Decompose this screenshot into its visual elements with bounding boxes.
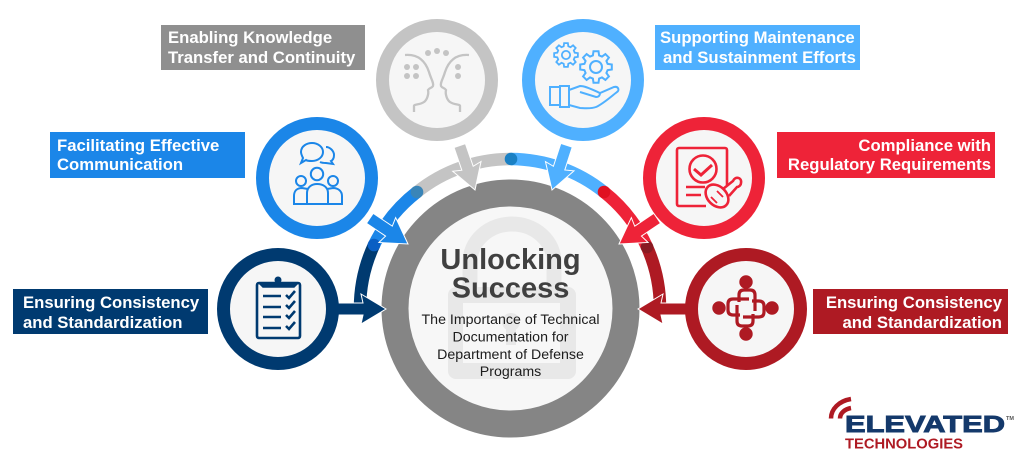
- label: maintenance: and Sustainment Efforts: [663, 48, 856, 67]
- label: communication: Facilitating Effective: [57, 136, 219, 155]
- panel: segmented outer arc: [360, 153, 660, 309]
- logo: Elevated Technologies: TM: [1006, 416, 1014, 422]
- label: consistency left: and Standardization: [23, 313, 182, 332]
- label: consistency right: and Standardization: [843, 313, 1002, 332]
- logo: Elevated Technologies: [831, 399, 1014, 452]
- label: consistency left: Ensuring Consistency: [23, 293, 200, 312]
- label: maintenance: [655, 25, 860, 70]
- panel: central hub: [395, 193, 626, 424]
- label: consistency left: [13, 289, 208, 334]
- arrow: light blue: [538, 141, 581, 195]
- icon: gears and hand: [528, 26, 638, 134]
- label: knowledge transfer: [161, 25, 365, 70]
- icon: linked people: [692, 254, 800, 364]
- title: Unlocking: [440, 244, 581, 276]
- arrow: blue: [361, 206, 416, 256]
- icon: compliance document and stamp: [650, 124, 758, 232]
- icon: padlock watermark: [448, 224, 576, 379]
- label: knowledge transfer: Enabling Knowledge: [168, 28, 332, 47]
- arrow: gray: [446, 141, 489, 195]
- label: knowledge transfer: Transfer and Continuity: [168, 48, 356, 67]
- label: consistency right: Ensuring Consistency: [826, 293, 1003, 312]
- icon: knowledge transfer faces: [382, 26, 492, 134]
- label: compliance: Compliance with: [858, 136, 991, 155]
- subtitle: Department of Defense: [437, 347, 584, 363]
- logo: Elevated Technologies: ELEVATED: [845, 411, 1005, 437]
- label: communication: Communication: [57, 155, 183, 174]
- label: maintenance: Supporting Maintenance: [660, 28, 855, 47]
- icon: checklist clipboard: [224, 254, 332, 364]
- arrow: navy: [338, 294, 386, 324]
- icon: people communication: [262, 124, 372, 232]
- logo: Elevated Technologies: TECHNOLOGIES: [845, 436, 963, 452]
- arrow: red: [611, 206, 666, 256]
- label: communication: [50, 132, 245, 178]
- subtitle: The Importance of Technical: [422, 312, 599, 328]
- subtitle: Documentation for: [453, 330, 569, 346]
- arrow: dark red: [638, 294, 686, 324]
- title: Success: [452, 272, 569, 304]
- label: consistency right: [813, 289, 1008, 334]
- subtitle: Programs: [480, 364, 541, 380]
- label: compliance: Regulatory Requirements: [788, 155, 991, 174]
- label: compliance: [777, 132, 995, 178]
